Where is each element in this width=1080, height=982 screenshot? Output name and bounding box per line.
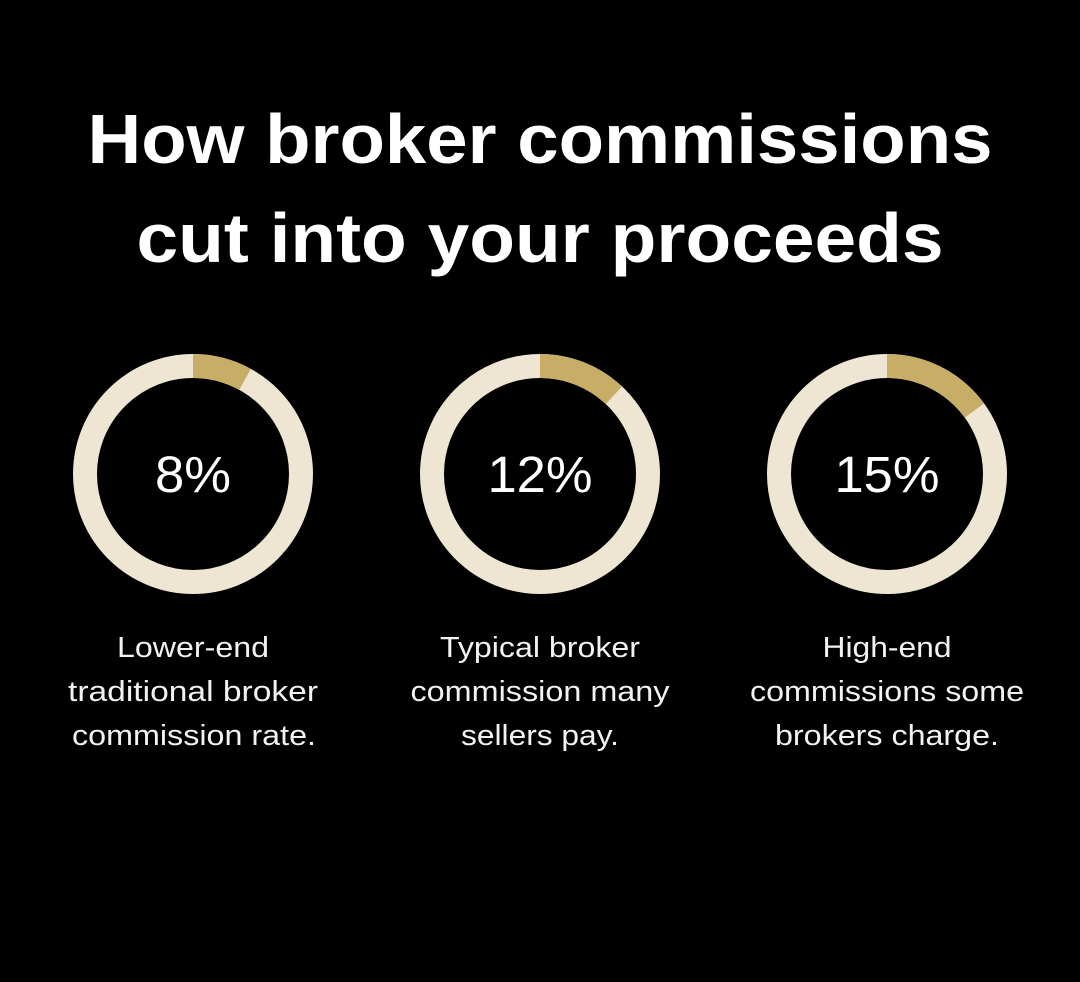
panel: 8% donut [85, 366, 301, 582]
panel: 12% donut: 12% [488, 446, 592, 503]
panel: 8% donut: 8% [155, 446, 231, 503]
title [88, 100, 992, 277]
text: 8% caption: commission rate. [72, 720, 316, 752]
panel: 15% donut: 15% [834, 446, 940, 503]
text: 8% caption: Lower-end [117, 632, 269, 664]
text: 8% caption: traditional broker [68, 676, 318, 708]
text: 15% caption: brokers charge. [775, 720, 999, 752]
panel: 15% donut [779, 366, 995, 582]
text: 12% caption: Typical broker [440, 632, 640, 664]
panel: 12% donut [432, 366, 648, 582]
text: 15% caption [750, 632, 1024, 752]
text: 8% caption [68, 632, 318, 752]
text: 15% caption: High-end [822, 632, 952, 664]
text: 15% caption: commissions some [750, 676, 1024, 708]
title: How broker commissions [88, 100, 992, 178]
title: cut into your proceeds [136, 199, 944, 277]
text: 12% caption [410, 632, 670, 752]
text: 12% caption: sellers pay. [461, 720, 619, 752]
text: 12% caption: commission many [410, 676, 670, 708]
